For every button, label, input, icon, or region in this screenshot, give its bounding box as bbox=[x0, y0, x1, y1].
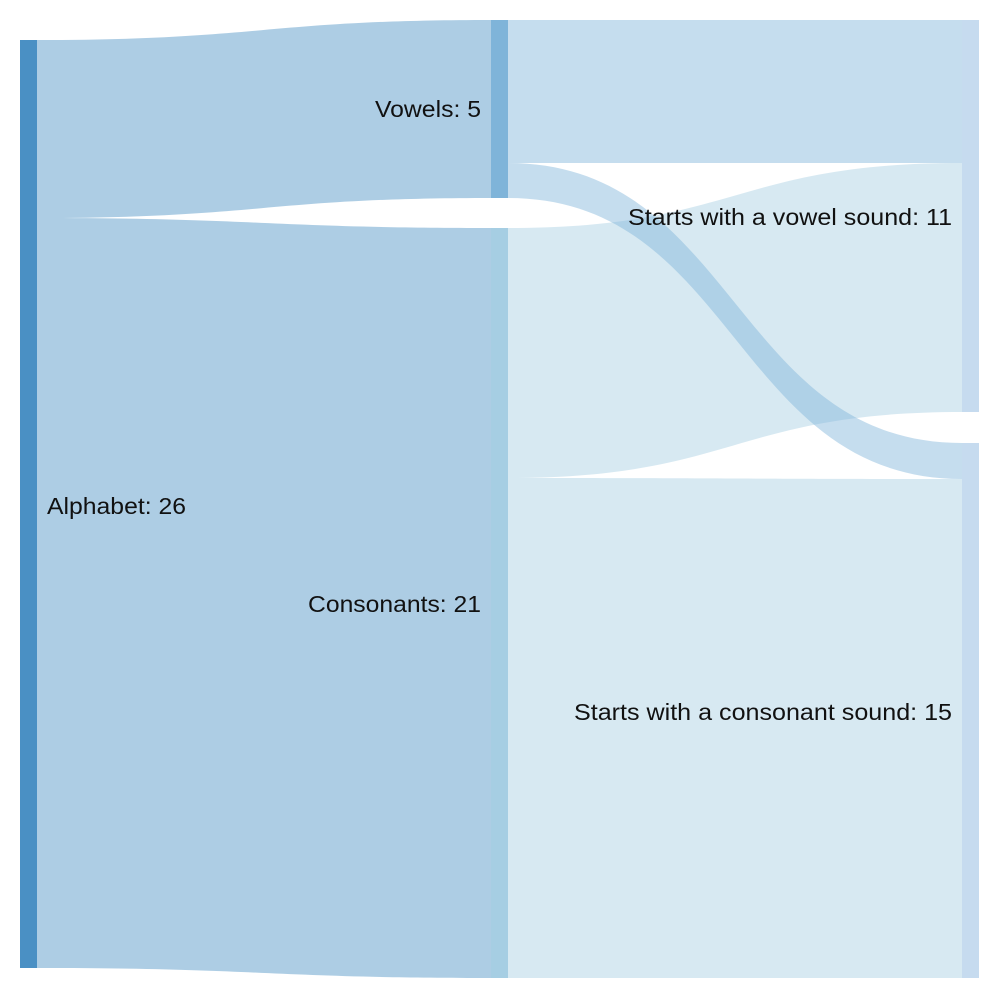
link: alphabet to vowels bbox=[37, 20, 491, 218]
label: vowel sound: Starts with a vowel sound: 11 bbox=[628, 204, 952, 230]
link: consonants to consonant sound bbox=[508, 478, 962, 978]
node: vowel sound bbox=[962, 20, 979, 412]
node: Alphabet bbox=[20, 40, 37, 968]
link: vowels to consonant sound bbox=[508, 163, 962, 479]
link: vowels to vowel sound bbox=[508, 20, 962, 163]
label: Consonants: Consonants: 21 bbox=[308, 591, 481, 617]
label: Alphabet: Alphabet: 26 bbox=[47, 493, 186, 519]
link: alphabet to consonants bbox=[37, 218, 491, 978]
label: Vowels: Vowels: 5 bbox=[375, 96, 481, 122]
node: consonant sound bbox=[962, 443, 979, 978]
node: Vowels bbox=[491, 20, 508, 198]
link: consonants to vowel sound bbox=[508, 163, 962, 478]
node: Consonants bbox=[491, 228, 508, 978]
label: consonant sound: Starts with a consonant sound: 15 bbox=[574, 699, 952, 725]
